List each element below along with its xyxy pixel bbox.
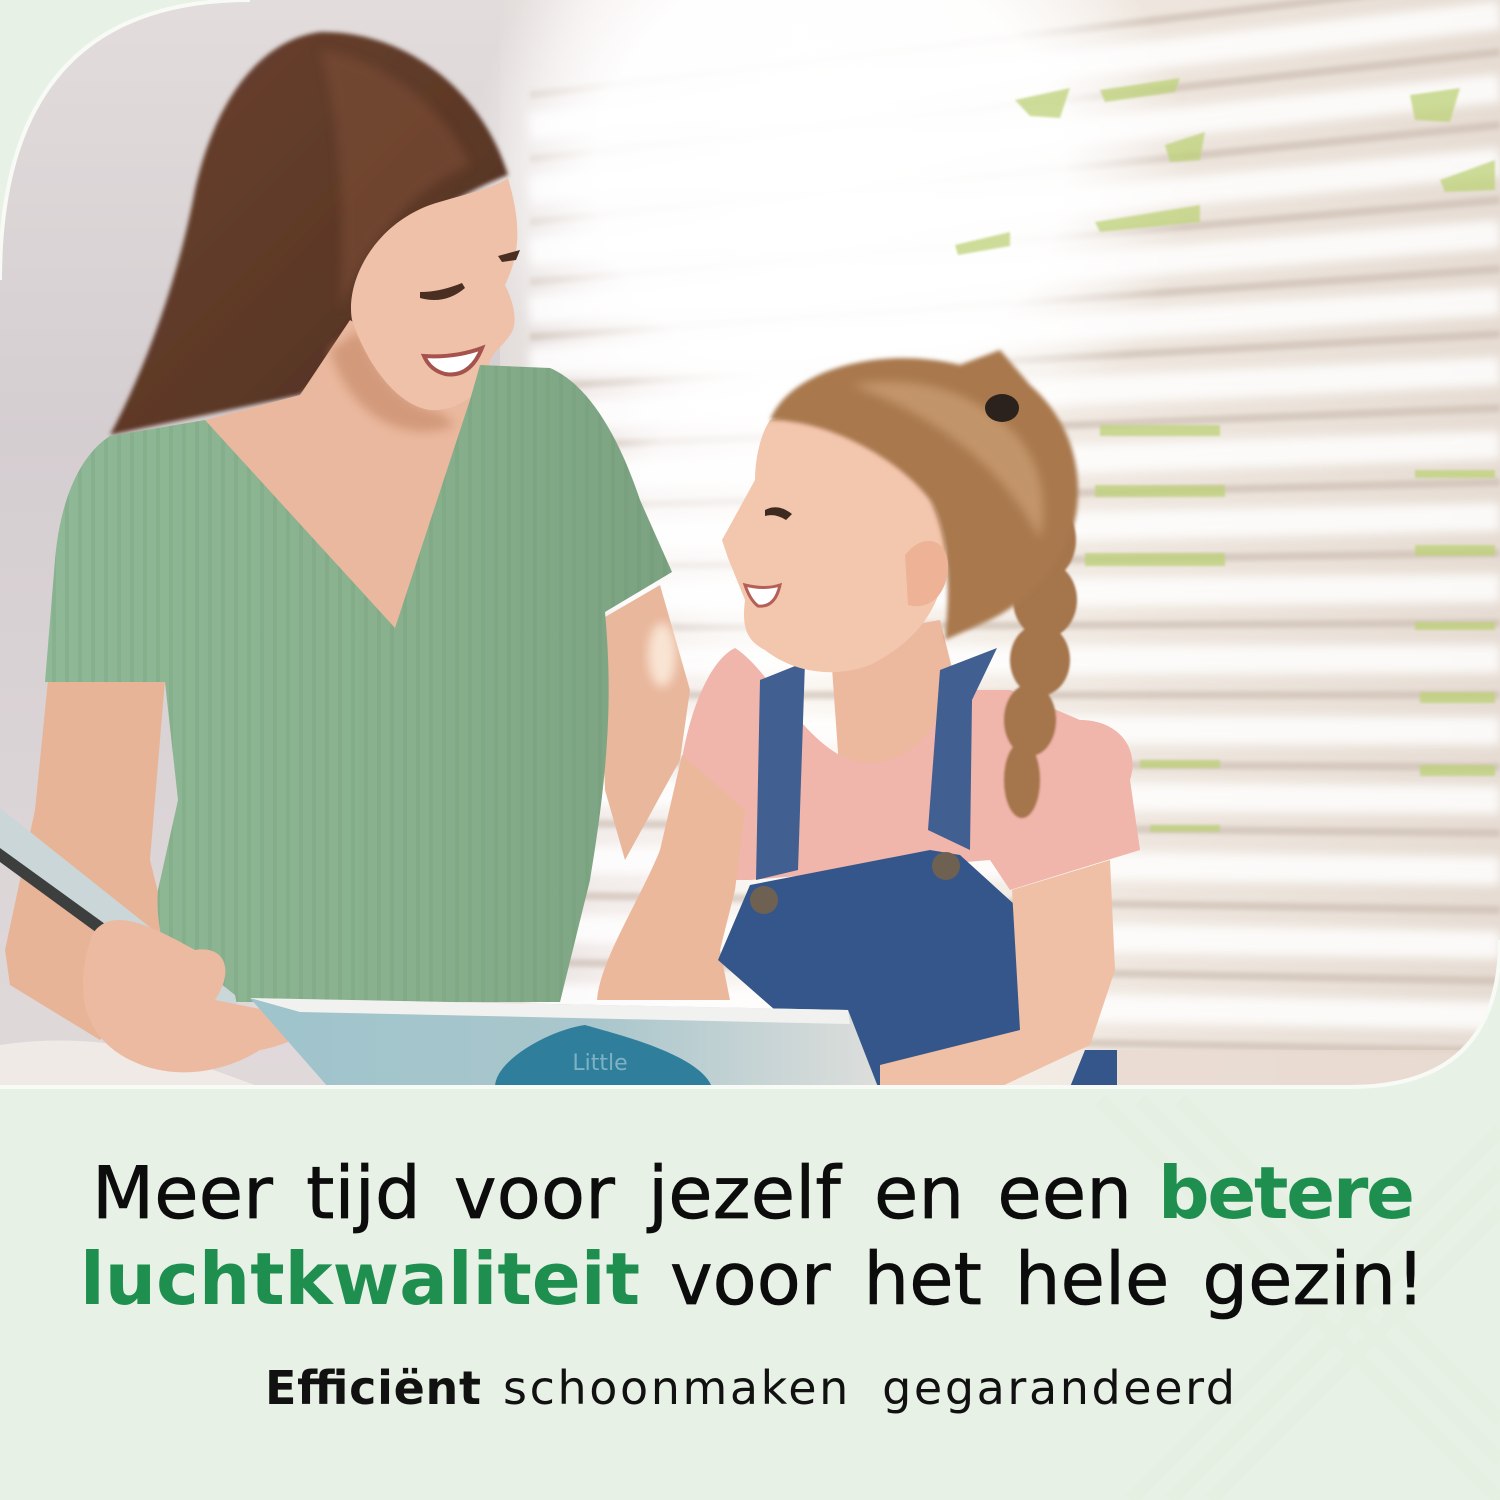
braid [1004, 498, 1077, 818]
woman [0, 32, 690, 1087]
left arm [5, 680, 175, 1040]
eye [765, 507, 792, 520]
right arm [600, 585, 690, 860]
face [351, 178, 517, 410]
neck [832, 620, 952, 762]
smile [424, 348, 482, 374]
shirt ribbing [45, 365, 672, 1002]
wall [0, 0, 500, 1085]
photo outline [0, 0, 1500, 1087]
hair tie [985, 394, 1019, 422]
white clothing at lap [0, 1040, 260, 1087]
eyes [420, 250, 520, 300]
pink t-shirt [682, 648, 1140, 890]
hair [110, 32, 508, 435]
neck and chest [205, 320, 480, 628]
sun patch on arm [648, 623, 676, 687]
girl [597, 350, 1140, 1087]
hair [770, 350, 1078, 640]
strap buttons [750, 852, 960, 914]
white page edge [250, 998, 850, 1024]
subheading [265, 1361, 1235, 1415]
highlight: luchtkwaliteit: luchtkwaliteit [80, 1237, 640, 1321]
open page [250, 998, 878, 1087]
subheading text: schoonmaken gegarandeerd [503, 1361, 1235, 1415]
denim leg at right [1070, 1050, 1117, 1087]
hand [83, 920, 307, 1072]
photo: mother and daughter reading [0, 0, 1500, 1087]
girl arm left [597, 755, 745, 1000]
hair highlight [324, 54, 468, 295]
drop on cover [495, 1025, 712, 1087]
lower glow [616, 431, 764, 635]
shirt [45, 365, 672, 1002]
highlight: betere: betere [1158, 1151, 1415, 1235]
glare [500, 0, 1168, 388]
leaves through the blinds [955, 78, 1495, 832]
neck shadow [330, 330, 455, 432]
heading line 1: Meer tijd voor jezelf en een [92, 1151, 1132, 1235]
girl arm right [880, 860, 1115, 1087]
denim overalls bib [718, 850, 1025, 1087]
mouth [745, 585, 780, 606]
bold word: Efficiënt [265, 1361, 481, 1415]
hair light strands [850, 381, 1044, 540]
dark book edge [0, 848, 104, 932]
slat gaps [530, 0, 1500, 1051]
face [722, 416, 946, 672]
ear [905, 541, 948, 606]
denim straps [756, 648, 997, 880]
slat highlights [530, 15, 1500, 1016]
book back cover [0, 808, 240, 1020]
window blinds [470, 0, 1500, 1087]
background pattern [1100, 1100, 1500, 1500]
lower sill [1117, 1050, 1460, 1085]
cover title: Little [572, 1051, 628, 1076]
heading [80, 1151, 1425, 1321]
book [250, 998, 878, 1087]
heading line 2: voor het hele gezin! [670, 1237, 1425, 1321]
